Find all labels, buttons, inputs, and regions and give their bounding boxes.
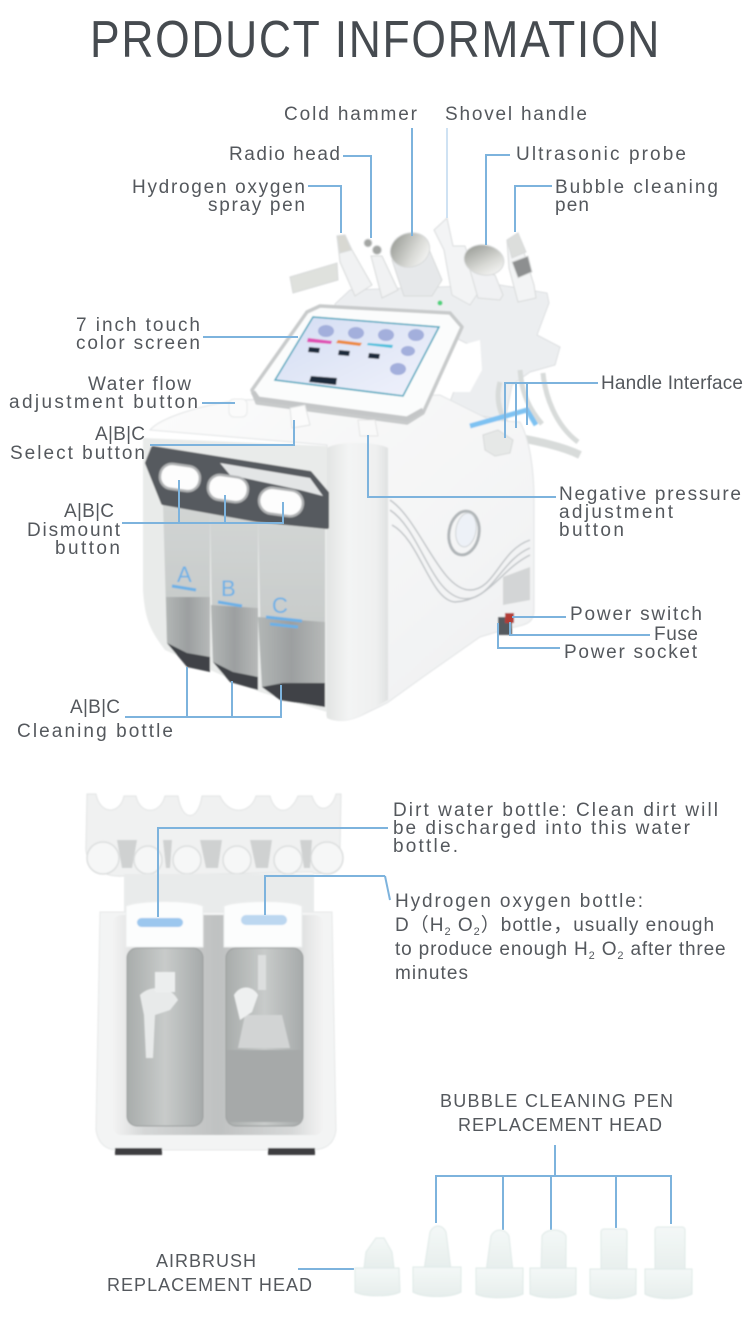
label: power socket: Power socket [564,642,698,663]
label: hydrogen oxygen spray pen: Hydrogen oxygen [132,177,305,198]
callout leader lines, rear machine [158,828,390,917]
tip: bubble 4 [590,1229,636,1298]
touch screen [275,317,439,396]
label: select button: A|B|C [95,424,145,445]
negative pressure knob [358,420,378,436]
pen: bubble cleaning [507,233,536,302]
text: dirt water bottle: be discharged into this water [393,818,691,839]
label: cleaning bottle [17,697,173,742]
label: hydrogen oxygen spray pen [132,177,305,216]
side dial [445,509,483,557]
heading: bubble cleaning pen replacement head: BUBBLE CLEANING PEN [440,1091,673,1111]
tip: airbrush [355,1238,400,1296]
pen: ultrasonic probe [462,242,506,300]
side wave pattern [390,500,530,602]
dark control bar [147,448,327,527]
label: touch screen: color screen [76,333,200,354]
label: water flow button [9,374,198,413]
right foot [268,1148,315,1155]
rear inner panel [112,915,324,1135]
label: touch screen [76,315,200,354]
label: dismount button: A|B|C [64,501,114,522]
rear body [96,912,336,1150]
label: water flow button: adjustment button [9,392,198,413]
label: dismount button: button [55,538,120,559]
label: dismount button [27,501,121,559]
heading: bubble cleaning pen replacement head: REPLACEMENT HEAD [458,1115,662,1135]
front column [327,443,388,721]
leader lines: bubble replacement heads [436,1145,671,1230]
replacement tips [355,1226,692,1298]
text: dirt water bottle [393,800,718,857]
label: select button: Select button [10,443,145,464]
label: bubble cleaning pen: pen [555,195,589,216]
tip: bubble 5 [645,1227,692,1298]
label: dismount button: Dismount [27,520,121,541]
left bottle [127,948,203,1126]
blue handle band [470,410,536,426]
heading: airbrush replacement head: REPLACEMENT HEAD [107,1275,312,1295]
rack pillars [117,840,312,868]
text: hydrogen oxygen bottle: O [602,939,617,960]
bottle B [210,512,258,690]
dismount buttons [158,462,305,518]
left cap label [137,918,183,927]
label: negative pressure button: button [559,520,624,541]
label: negative pressure button: Negative pressure [559,484,741,505]
label: cleaning bottle: Cleaning bottle [17,721,173,742]
label: ultrasonic probe: Ultrasonic probe [516,144,686,165]
indicator light [438,300,442,306]
bezel silver strip [253,392,423,419]
text: hydrogen oxygen bottle [395,891,726,984]
product plate [503,567,530,605]
select knob [290,405,310,428]
screen readouts [308,347,380,385]
water flow knob [229,399,247,417]
label: negative pressure button [559,484,741,541]
text: hydrogen oxygen bottle: minutes [395,963,468,984]
heading: airbrush replacement head: AIRBRUSH [156,1251,256,1271]
label: bubble cleaning pen: Bubble cleaning [555,177,718,198]
label: fuse: Fuse [654,624,698,645]
left cap [126,902,203,947]
rack cup holes [87,842,343,874]
tip: bubble 2 [476,1230,523,1298]
main machine photo [143,218,580,721]
pen: radio head [364,239,398,298]
bottle label strips [172,586,302,627]
left foot [115,1148,162,1155]
text: dirt water bottle: bottle. [393,836,458,857]
right cap [224,902,302,947]
tip: bubble 3 [530,1230,576,1298]
text: dirt water bottle: Dirt water bottle: Clean dirt will [393,800,718,821]
text: hydrogen oxygen bottle: 2 [617,950,624,962]
front frame [143,438,327,712]
labels around main machine [9,104,743,742]
heading: bubble cleaning pen replacement head [440,1091,673,1135]
label: touch screen: 7 inch touch [76,315,200,336]
pen: cold hammer [385,227,442,296]
bottle letters: C [272,593,288,618]
pen holder [335,285,560,420]
handle interface connector [483,430,513,456]
rear column [124,874,314,914]
label: radio head: Radio head [229,144,340,165]
label: handle interface: Handle Interface [601,373,743,394]
label: hydrogen oxygen spray pen: spray pen [208,195,305,216]
bottle letters: B [221,576,236,601]
right cap label [241,915,287,925]
screen mode tabs [307,338,393,348]
text: hydrogen oxygen bottle: 2 [589,950,596,962]
holder window [452,340,482,392]
title: PRODUCT INFORMATION [90,11,661,69]
label: water flow button: Water flow [88,374,191,395]
chrome highlight on bar [220,463,323,496]
leader line: airbrush head [298,1268,354,1270]
power connector [498,613,514,635]
bottle letters [177,562,288,618]
label: negative pressure button: adjustment [559,502,674,523]
rear machine photo [86,794,343,1155]
text: hydrogen oxygen bottle: to produce enough H [395,939,589,960]
label: bubble cleaning pen [555,177,718,216]
pen rack [86,794,341,876]
screen icons [318,325,424,375]
label: select button [10,424,145,464]
pen: shovel handle [434,218,480,305]
bottle letters: A [177,562,192,587]
label: power switch: Power switch [570,604,702,625]
text: hydrogen oxygen bottle: ）bottle，usually enough [481,914,715,936]
tip: bubble 1 [413,1226,461,1296]
screen bezel [252,306,462,423]
text: hydrogen oxygen bottle: 2 [444,926,452,938]
label: cleaning bottle: A|B|C [70,697,120,718]
bottle C [258,520,325,707]
label: shovel handle: Shovel handle [445,104,587,125]
text: hydrogen oxygen bottle: after three [624,939,726,960]
text: hydrogen oxygen bottle: Hydrogen oxygen bottle: [395,891,643,912]
pen: hydrogen oxygen spray [290,235,372,296]
callout leader lines, main machine [122,128,650,717]
label: cold hammer: Cold hammer [284,104,418,125]
text: hydrogen oxygen bottle: D（H [395,915,444,936]
text: hydrogen oxygen bottle: 2 [474,926,481,938]
right bottle [226,948,303,1126]
cables [498,370,580,455]
machine side and top [150,395,534,720]
heading: airbrush replacement head [107,1251,312,1295]
bottle A [163,503,210,672]
text: hydrogen oxygen bottle: O [458,915,474,936]
